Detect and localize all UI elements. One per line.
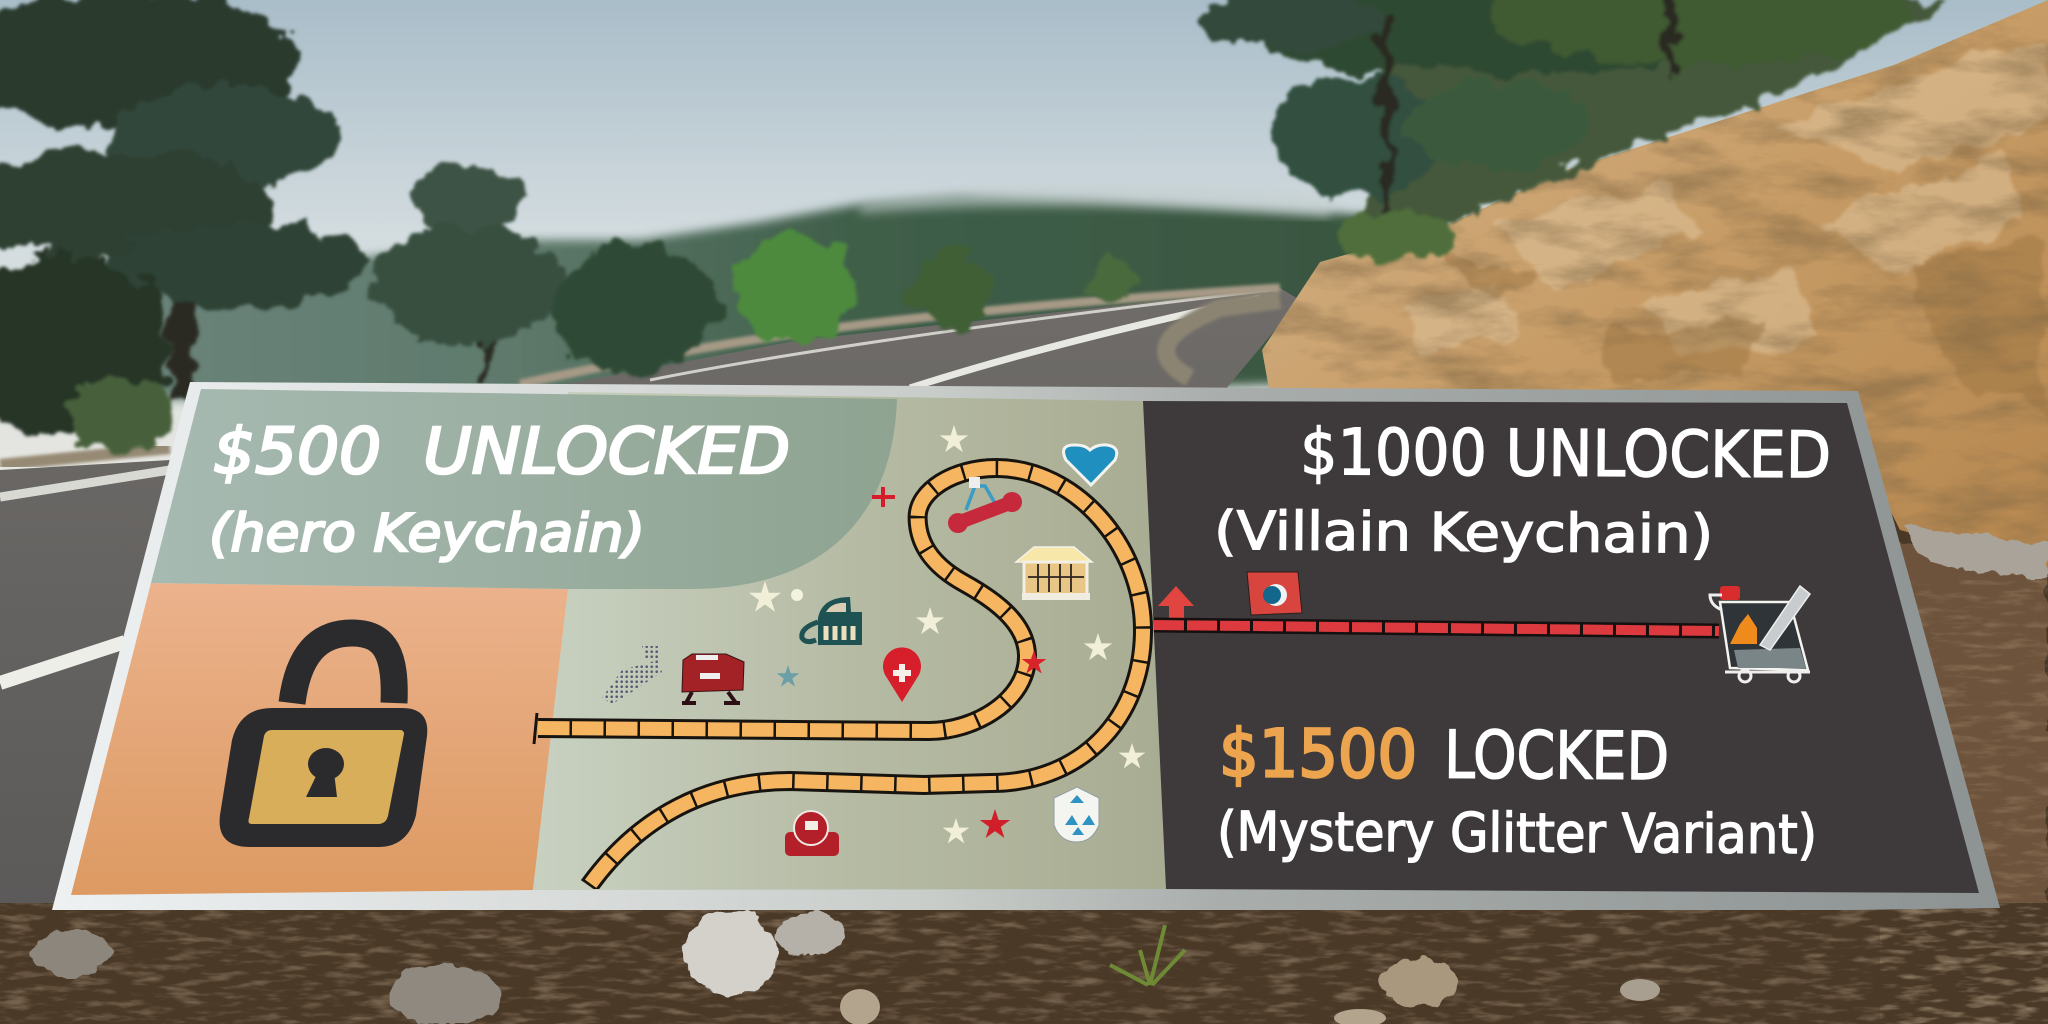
- icon: red plus: [872, 487, 895, 507]
- background: upper right trees: [1200, 0, 1950, 259]
- icon: grey speckle cluster: [602, 646, 662, 704]
- background: rock cliff: [1240, 0, 2048, 580]
- panel: sign board: [52, 382, 2000, 910]
- subheading: villain keychain: (Villain Keychain): [1214, 501, 1713, 565]
- icon: teal lock mug: [802, 597, 862, 645]
- icon: yellow house cage: [1016, 547, 1092, 600]
- background: dirt and rocks: [0, 525, 2048, 1024]
- background: distant hills: [0, 184, 1440, 400]
- icon: red round badge: [785, 811, 839, 856]
- subheading: hero keychain: (hero Keychain): [209, 504, 645, 564]
- sign frame: [52, 382, 2000, 910]
- icon: red robot bag: [682, 654, 744, 703]
- icon: villain cart: [1710, 586, 1810, 682]
- icon: red map pin: [883, 647, 921, 702]
- heading: $1500 locked: LOCKED: [1444, 717, 1669, 795]
- panel: orange lock area: [71, 583, 568, 895]
- decorative stars: [749, 425, 1145, 843]
- heading: $500 unlocked: $500 UNLOCKED: [213, 415, 790, 488]
- path: red dashed track: [1154, 625, 1719, 631]
- panel: dark right area: [1143, 401, 1979, 893]
- icon: padlock: [220, 633, 427, 847]
- heading: $1000 unlocked: $1000 UNLOCKED: [1300, 416, 1831, 493]
- icon: red up arrow: [1158, 586, 1194, 618]
- icon: red keychain: [948, 477, 1022, 533]
- background: roadside trees: [0, 0, 1136, 453]
- background: sky: [0, 0, 2048, 470]
- icon: blue heart: [1064, 445, 1117, 485]
- icon: blue and white shield: [1054, 787, 1099, 842]
- panel: teal heading area: [151, 389, 897, 589]
- panel: sage path area: [533, 392, 1166, 890]
- subheading: mystery glitter variant: (Mystery Glitter Variant): [1217, 800, 1817, 866]
- heading: $1500 locked: $1500: [1219, 715, 1417, 793]
- path: winding orange track: [534, 468, 1143, 886]
- icon: red burst on track: [1022, 650, 1046, 674]
- background: road: [0, 288, 1300, 910]
- icon: red eye tile: [1247, 572, 1302, 615]
